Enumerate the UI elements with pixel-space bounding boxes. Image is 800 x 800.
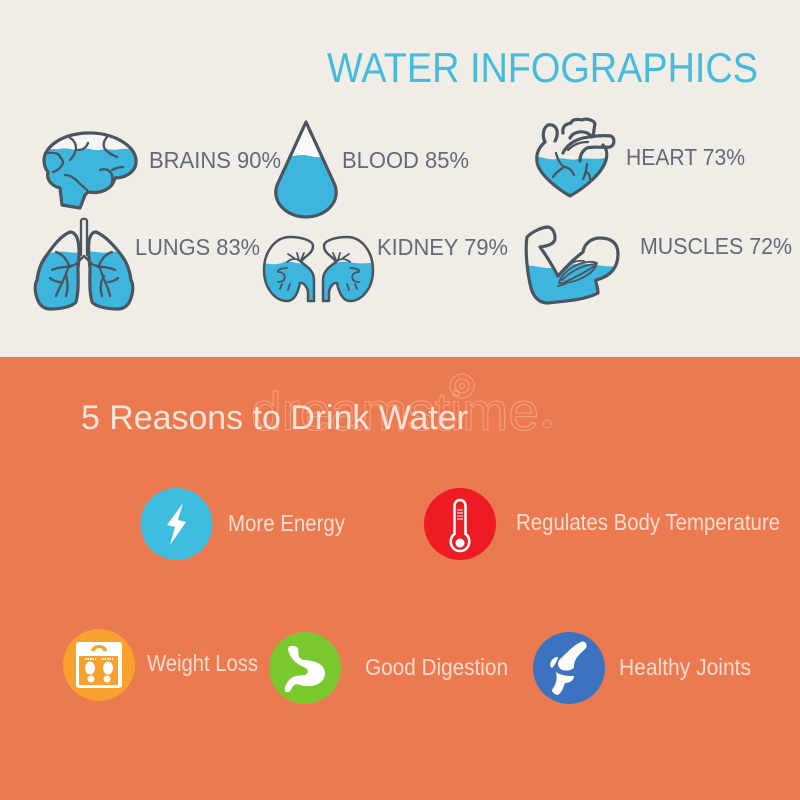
title: WATER INFOGRAPHICS — [327, 44, 758, 91]
icon: energy — [140, 488, 212, 560]
icon: stomach — [269, 632, 341, 704]
label: heart: HEART 73% — [626, 144, 745, 170]
reason: weight loss: Weight Loss — [147, 650, 258, 676]
label: kidney: KIDNEY 79% — [377, 234, 508, 260]
reason: more energy: More Energy — [228, 510, 345, 536]
icon: brain — [40, 133, 140, 212]
watermark: dreamstime — [251, 382, 539, 442]
icon: lungs — [30, 219, 140, 312]
background: bottom panel — [0, 357, 800, 800]
reason: healthy joints: Healthy Joints — [619, 654, 751, 680]
heading: 5 reasons: 5 Reasons to Drink Water — [81, 399, 468, 437]
icon: blood drop — [274, 120, 338, 219]
icon: kidneys — [260, 237, 376, 304]
icon: scale — [63, 629, 135, 701]
icon: muscle — [520, 227, 620, 306]
label: brains: BRAINS 90% — [149, 147, 281, 173]
reason: good digestion: Good Digestion — [365, 654, 508, 680]
icon: heart — [530, 119, 614, 200]
icon: joint — [533, 632, 605, 704]
icon: thermometer — [424, 488, 496, 560]
label: lungs: LUNGS 83% — [135, 234, 260, 260]
background: top panel — [0, 0, 800, 358]
label: blood: BLOOD 85% — [342, 147, 469, 173]
